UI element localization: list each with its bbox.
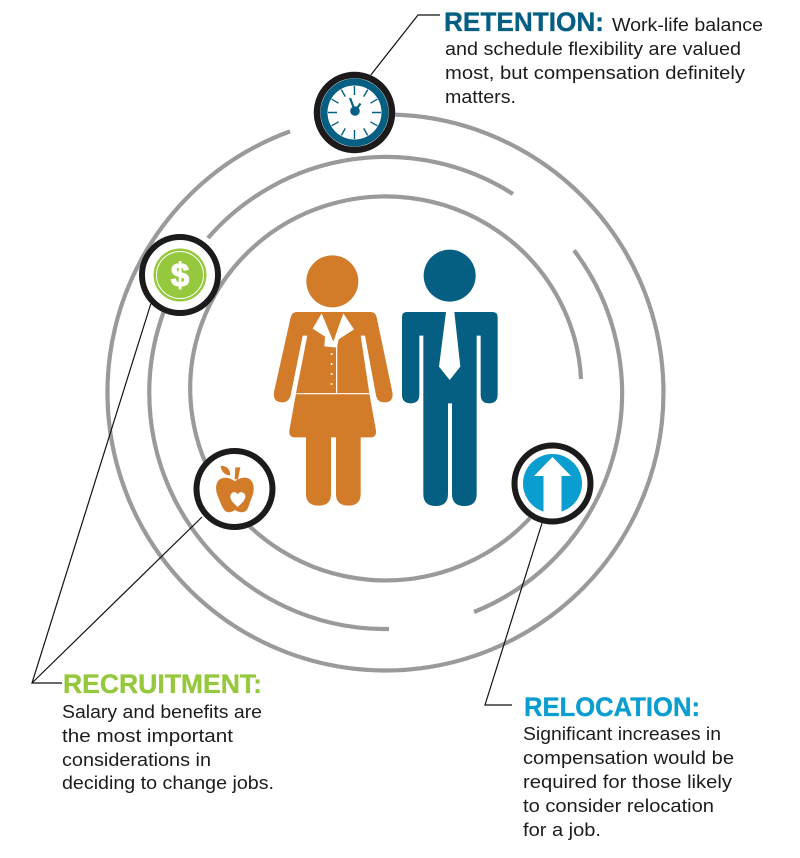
retention callout: most, but compensation definitely (445, 63, 745, 83)
recruitment callout: considerations in (62, 750, 211, 770)
icon: clock (314, 72, 396, 154)
relocation callout: compensation would be (523, 748, 734, 768)
icon: apple with heart (194, 448, 276, 530)
retention callout: Work-life balance (612, 15, 763, 35)
retention callout (444, 7, 763, 107)
leader lines (32, 15, 543, 705)
recruitment callout: deciding to change jobs. (62, 773, 274, 793)
retention callout: matters. (445, 87, 516, 107)
retention callout: and schedule flexibility are valued (445, 39, 741, 59)
icon: dollar: $ (171, 256, 189, 294)
recruitment callout: RECRUITMENT: (63, 669, 262, 699)
relocation callout: Significant increases in (523, 724, 721, 744)
recruitment callout: the most important (62, 726, 233, 746)
retention callout: RETENTION: (444, 7, 604, 37)
icon: relocation arrow (512, 442, 594, 524)
icon: man figure (402, 250, 498, 506)
recruitment callout: Salary and benefits are (62, 702, 262, 722)
relocation callout (523, 692, 734, 840)
recruitment callout (62, 669, 274, 793)
concentric ring arcs (107, 115, 663, 670)
relocation callout: required for those likely (523, 772, 732, 792)
icon: dollar (139, 234, 221, 316)
relocation callout: for a job. (523, 820, 601, 840)
icon: woman figure (274, 255, 393, 506)
relocation callout: to consider relocation (523, 796, 714, 816)
relocation callout: RELOCATION: (524, 692, 700, 722)
